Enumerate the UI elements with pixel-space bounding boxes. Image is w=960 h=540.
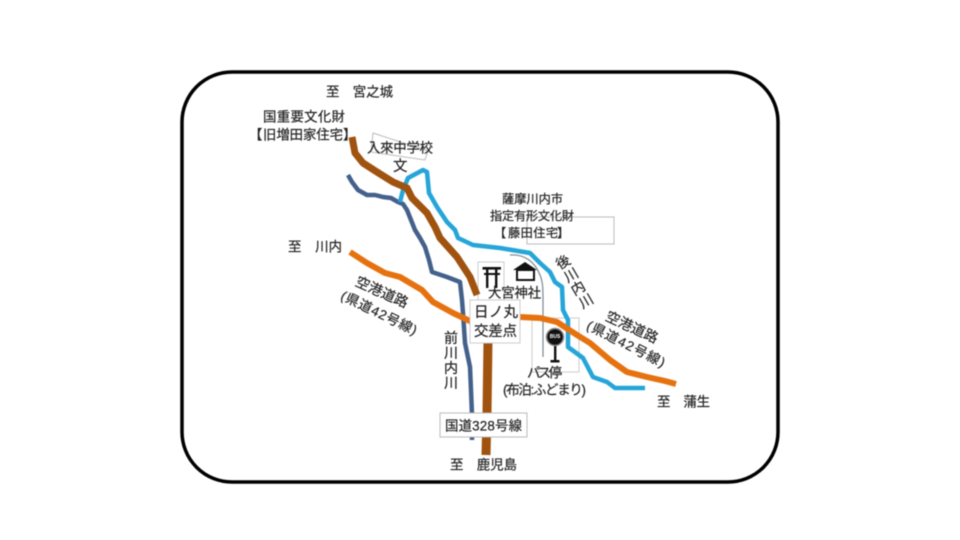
label: bus stop name: (布泊:ふどまり)	[503, 382, 586, 398]
label: Nochi-kawa-uchi river	[553, 252, 596, 311]
label: city cultural property: 薩摩川内市	[502, 192, 563, 206]
thin grey access road	[510, 255, 543, 357]
label: bus stop name	[503, 366, 586, 398]
label: Iriki junior high school: 文	[393, 158, 408, 175]
label: airport road west: (県道42号線)	[338, 288, 420, 338]
torii box	[478, 262, 504, 302]
label: Nochi-kawa-uchi river: 内	[568, 278, 588, 298]
label: to Miyanojo: 至 宮之城	[326, 84, 393, 100]
river: Maekawa-uchi (navy)	[348, 175, 472, 440]
road: national route 328 lower (brown)	[486, 340, 488, 455]
map frame	[182, 72, 778, 482]
Fujita residence label box	[527, 217, 614, 244]
icon: shrine building	[513, 262, 537, 280]
tilted school label box	[371, 133, 428, 160]
label: national cultural property: 】	[343, 128, 356, 142]
label: Maekawa-uchi river: 内	[444, 360, 458, 376]
label: city cultural property: 】	[557, 226, 569, 240]
route 328 label box: 国道328号線	[445, 418, 523, 434]
label: national cultural property: 【	[249, 128, 262, 142]
label: Nochi-kawa-uchi river: 川	[576, 291, 596, 311]
icon: bus stop: BUS	[550, 334, 561, 340]
icon: torii gate	[482, 267, 501, 288]
label: city cultural property: 【	[494, 226, 506, 240]
label: Maekawa-uchi river: 川	[444, 375, 458, 391]
bus stop box	[532, 318, 579, 372]
Hinomaru intersection box: 交差点	[474, 323, 517, 340]
Hinomaru intersection box: 日ノ丸	[474, 304, 518, 321]
label: city cultural property: 指定有形文化財	[490, 208, 574, 223]
Hinomaru intersection box	[470, 300, 520, 343]
label: Iriki junior high school	[367, 140, 433, 175]
river: Nochi-kawa-uchi (cyan)	[400, 170, 645, 388]
label: to Sendai: 至 川内	[288, 240, 342, 254]
label: Maekawa-uchi river	[444, 330, 458, 391]
label: Nochi-kawa-uchi river: 後	[553, 252, 573, 272]
label: Omiya shrine: 大宮神社	[488, 286, 541, 300]
label: national cultural property: 旧増田家住宅	[263, 128, 343, 142]
label: Nochi-kawa-uchi river: 川	[561, 265, 581, 285]
label: Maekawa-uchi river: 川	[444, 345, 458, 361]
label: airport road west: 空港道路	[353, 273, 411, 311]
label: bus stop name: パス停	[527, 366, 562, 380]
label: city cultural property: 藤田住宅	[508, 226, 558, 240]
label: national cultural property	[249, 110, 356, 142]
label: Maekawa-uchi river: 前	[444, 330, 458, 346]
road: airport road west (orange)	[350, 252, 472, 322]
label: to Gamo: 至 蒲生	[657, 394, 710, 410]
icon: bus stop	[546, 328, 564, 362]
route 328 label box	[440, 413, 527, 437]
label: airport road east: 空港道路	[603, 308, 661, 346]
label: Iriki junior high school: 入來中学校	[367, 140, 433, 156]
label: city cultural property	[490, 192, 574, 240]
label: national cultural property: 国重要文化財	[263, 110, 345, 124]
road: airport road east (orange)	[520, 317, 676, 384]
label: airport road east: (県道42号線)	[584, 318, 668, 370]
label: to Kagoshima: 至 鹿児島	[450, 458, 517, 472]
road: national route 328 upper (brown)	[352, 137, 477, 295]
